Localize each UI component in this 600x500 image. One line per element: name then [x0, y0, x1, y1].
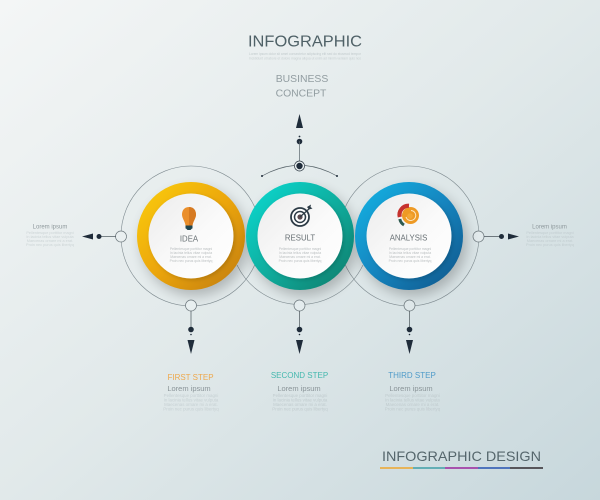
label: analysis: ANALYSIS: [390, 234, 427, 243]
text block: right lorem ipsum: Proin nec purus quis libertyq: [526, 243, 574, 247]
panel: left connector: [82, 231, 126, 242]
panel: result circle: [246, 182, 358, 296]
body text: result: Maecenas ornare mi a erat.: [279, 255, 321, 259]
text block: third step: [385, 371, 441, 412]
text block: second step: Lorem ipsum: [277, 384, 321, 393]
body text: idea: Proin nec purus quis libertyq: [170, 259, 212, 263]
text block: third step: Pellentesque porttitor magni: [385, 393, 440, 398]
body text: result: Pellentesque porttitor magni: [279, 247, 321, 251]
text block: left lorem ipsum: Proin nec purus quis libertyq: [26, 243, 74, 247]
bottom connector: third step: [404, 300, 415, 354]
body text: idea: Pellentesque porttitor magni: [170, 247, 212, 251]
text block: left lorem ipsum: Maecenas ornare mi a erat.: [27, 239, 73, 243]
text block: third step: Proin nec purus quis libertyq: [385, 406, 441, 412]
panel: right connector: [473, 231, 519, 242]
outer thin ring: left: [121, 166, 261, 306]
label: result: RESULT: [285, 233, 315, 242]
panel: idea circle: [137, 182, 249, 296]
text block: second step: In lacinia tellus vitae vulputa: [273, 398, 328, 402]
text block: right lorem ipsum: In lacinia tellus vitae vulputa: [526, 235, 575, 239]
text block: right lorem ipsum: Maecenas ornare mi a erat.: [527, 239, 573, 243]
text block: second step: SECOND STEP: [271, 371, 328, 380]
text block: third step: Lorem ipsum: [389, 384, 433, 393]
text block: left lorem ipsum: Lorem ipsum: [33, 225, 67, 231]
label: idea: IDEA: [180, 234, 199, 244]
body text: analysis: [389, 247, 431, 263]
outer thin ring: middle (bottom arc): [237, 265, 363, 304]
bottom connector: first step: [186, 300, 196, 354]
text block: first step: Maecenas ornare mi a erat.: [164, 402, 218, 407]
footer title: INFOGRAPHIC DESIGN: [382, 448, 541, 464]
text block: second step: Pellentesque porttitor magni: [273, 393, 327, 398]
title: [248, 34, 362, 60]
text block: third step: Maecenas ornare mi a erat.: [386, 402, 439, 407]
body text: analysis: Pellentesque porttitor magni: [389, 247, 431, 251]
subtitle: business concept: CONCEPT: [276, 89, 327, 100]
text block: second step: Maecenas ornare mi a erat.: [273, 402, 327, 407]
subtitle: business concept: [276, 74, 328, 100]
text block: third step: In lacinia tellus vitae vulputa: [385, 398, 440, 402]
text block: first step: Lorem ipsum: [167, 384, 211, 393]
text block: left lorem ipsum: In lacinia tellus vitae vulputa: [26, 235, 75, 239]
body text: idea: In lacinia tellus vitae vulputa: [170, 251, 212, 255]
icon: light bulb: [182, 207, 196, 230]
panel: analysis circle: [355, 182, 467, 296]
body text: result: [279, 247, 321, 263]
title: INFOGRAPHIC: [248, 34, 362, 50]
text block: second step: Proin nec purus quis libertyq: [272, 406, 328, 412]
text block: first step: Proin nec purus quis libertyq: [163, 406, 219, 412]
footer colour bar: [380, 467, 543, 469]
text block: right lorem ipsum: Pellentesque porttitor magni: [526, 231, 574, 235]
body text: analysis: Proin nec purus quis libertyq: [389, 259, 431, 263]
text block: first step: In lacinia tellus vitae vulputa: [164, 398, 219, 402]
body text: idea: Maecenas ornare mi a erat.: [170, 255, 212, 259]
text block: left lorem ipsum: [26, 225, 75, 247]
text block: first step: Pellentesque porttitor magni: [164, 393, 218, 398]
body text: analysis: In lacinia tellus vitae vulputa: [389, 251, 431, 255]
outer thin ring: right: [339, 166, 479, 306]
text block: right lorem ipsum: Lorem ipsum: [532, 225, 567, 231]
icon: target: [291, 204, 312, 226]
text block: right lorem ipsum: [526, 225, 575, 247]
body text: analysis: Maecenas ornare mi a erat.: [389, 255, 431, 259]
body text: result: Proin nec purus quis libertyq: [279, 259, 321, 263]
text block: first step: [163, 373, 219, 412]
text block: left lorem ipsum: Pellentesque porttitor magni: [26, 231, 74, 235]
body text: result: In lacinia tellus vitae vulputa: [279, 251, 321, 255]
top connector arrow: [261, 114, 338, 177]
text block: second step: [271, 371, 328, 412]
body text: idea: [170, 247, 212, 263]
text block: first step: FIRST STEP: [167, 373, 214, 382]
icon: donut chart: [400, 206, 419, 225]
subtitle: business concept: BUSINESS: [276, 74, 328, 85]
text block: third step: THIRD STEP: [388, 371, 436, 380]
title: Lorem ipsum dolor sit amet consectetur adipiscing elit sed do eiusmod tempor: [249, 52, 362, 56]
title: Incididunt ut labore et dolore magna aliqua ut enim ad minim veniam quis nos: [249, 56, 361, 60]
bottom connector: second step: [294, 300, 305, 354]
